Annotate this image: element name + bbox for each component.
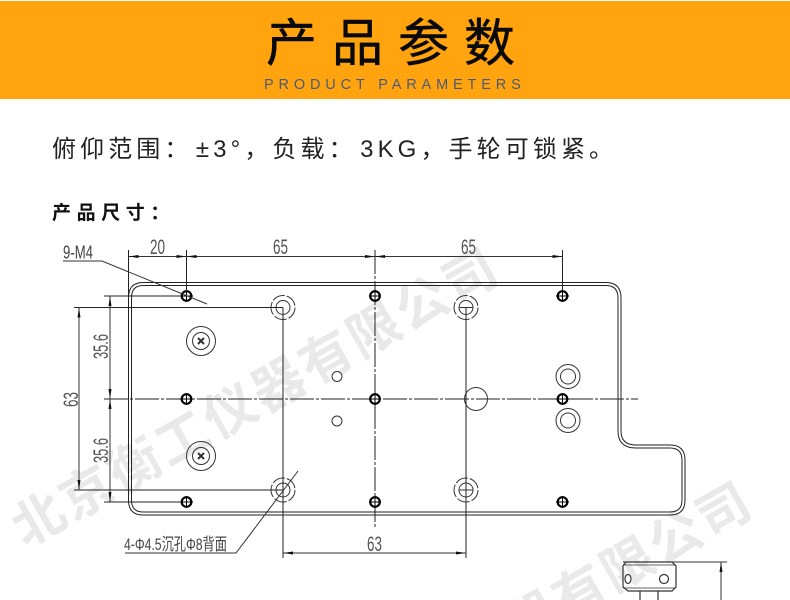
extension lines — [74, 250, 562, 558]
leader: counterbore note: 4-Φ4.5沉孔Φ8背面 — [124, 535, 227, 554]
dimension labels: 65 — [461, 236, 476, 259]
centre lines — [104, 250, 638, 528]
subtitle: PRODUCT PARAMETERS — [264, 77, 526, 93]
dimension labels: 20 — [150, 236, 165, 259]
leader: 9-M4 — [63, 242, 207, 304]
watermark: company name upper: 北京衡工仪器有限公司 — [2, 238, 510, 558]
header band — [0, 1, 790, 99]
dimension lines and arrows — [78, 255, 727, 600]
dimension labels: 63 — [367, 533, 382, 556]
leader: counterbore note — [124, 471, 298, 554]
title: 产品参数 — [266, 15, 530, 72]
screw heads — [186, 326, 216, 470]
spec line: 俯仰范围：±3°，负载：3KG，手轮可锁紧。 — [52, 136, 617, 163]
leader: 9-M4: 9-M4 — [63, 242, 93, 262]
plain holes — [332, 364, 580, 432]
dimension labels — [60, 236, 476, 556]
plate outline — [128, 282, 685, 515]
section heading: 产品尺寸： — [52, 203, 175, 224]
side-view part — [623, 562, 676, 600]
dimension labels: 63 — [60, 392, 83, 407]
counterbored holes — [271, 296, 478, 502]
dimension labels: 35.6 — [90, 438, 113, 463]
dimension labels: 35.6 — [90, 334, 113, 359]
M4 threaded holes — [180, 290, 569, 508]
dimension labels: 65 — [273, 236, 288, 259]
